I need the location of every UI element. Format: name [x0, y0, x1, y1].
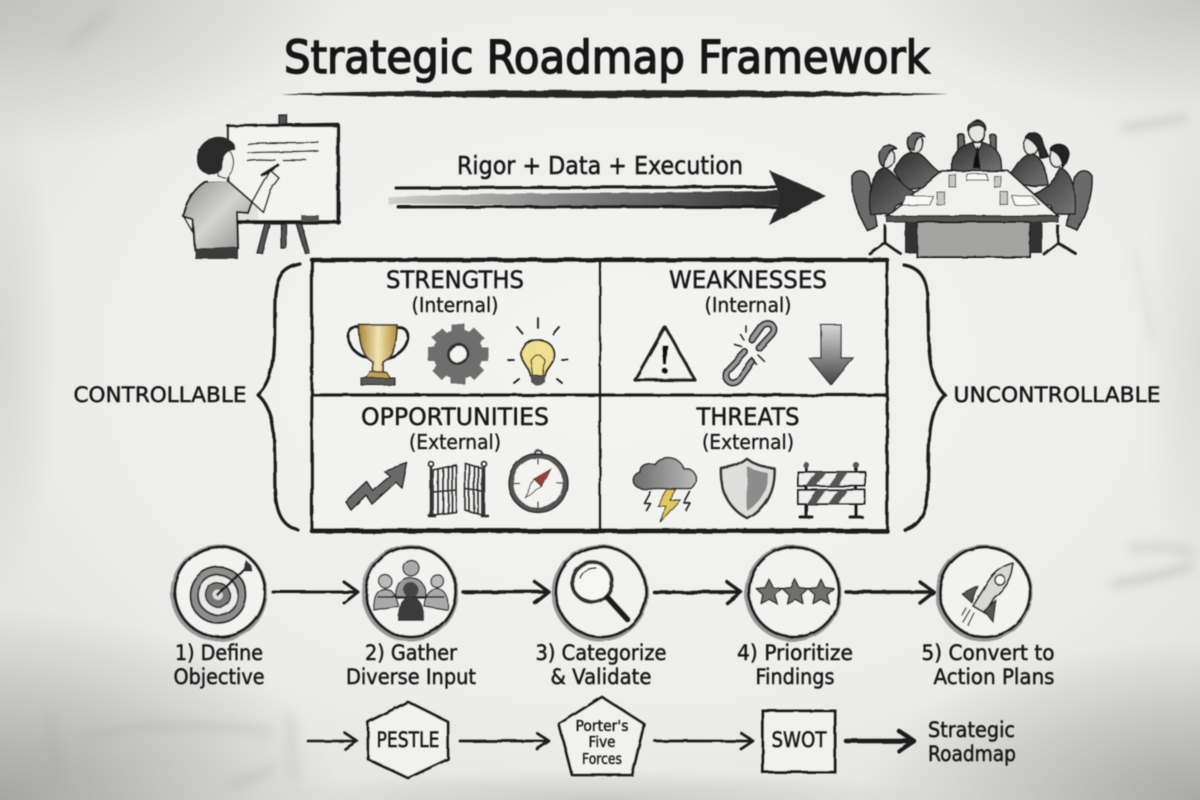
- left brace: controllable: [258, 264, 300, 530]
- heading: weaknesses: WEAKNESSES: [669, 266, 827, 294]
- step 4: prioritize findings: [737, 547, 853, 689]
- shape: Porter's Five Forces pentagon: Porter's: [576, 717, 629, 735]
- label: gather diverse input: [346, 641, 476, 689]
- arrow: step 1 to 2: [273, 582, 358, 603]
- shape: SWOT box: SWOT: [772, 728, 827, 752]
- label: uncontrollable: UNCONTROLLABLE: [954, 383, 1160, 407]
- chairs: [852, 134, 1092, 230]
- heading: threats: THREATS: [696, 403, 800, 431]
- arrow: step 2 to 3: [463, 582, 549, 603]
- icon: open gate: [428, 462, 489, 516]
- heading: threats: [696, 403, 800, 454]
- arrow: into PESTLE: [308, 733, 357, 749]
- label: controllable: CONTROLLABLE: [74, 383, 246, 407]
- label: define objective: 1) Define: [175, 641, 263, 665]
- arrow: SWOT to roadmap: [846, 731, 914, 751]
- icon: trophy: [348, 325, 408, 385]
- title underline: [280, 90, 948, 98]
- step 1: define objective: [173, 547, 265, 689]
- heading: strengths: (Internal): [412, 293, 498, 317]
- tools row: PESTLE to strategic roadmap: [308, 697, 1016, 778]
- icon: team around a table: [364, 547, 456, 639]
- arrow: step 3 to 4: [654, 582, 741, 603]
- table: [887, 171, 1058, 257]
- label: prioritize findings: 4) Prioritize: [737, 641, 853, 665]
- step 2: gather diverse input: [346, 547, 476, 689]
- label: gather diverse input: Diverse Input: [346, 665, 476, 689]
- label: convert to action plans: [922, 641, 1054, 689]
- arrow: PESTLE to Porter's: [460, 733, 549, 749]
- arrow: step 4 to 5: [846, 582, 934, 603]
- icon: rocket: [938, 547, 1030, 639]
- people: [870, 120, 1075, 214]
- shape: Porter's Five Forces pentagon: Forces: [582, 750, 622, 768]
- label: categorize and validate: [536, 641, 666, 689]
- right brace: uncontrollable: [904, 265, 945, 530]
- shape: Porter's Five Forces pentagon: Five: [588, 733, 616, 751]
- panel: weaknesses: [635, 266, 853, 385]
- icon: road barricade: [798, 462, 865, 517]
- icon: compass: [508, 450, 568, 512]
- shape: SWOT box: [763, 711, 835, 772]
- icon: storm cloud: [633, 458, 696, 522]
- icon: warning triangle: [635, 327, 695, 380]
- panel: threats: [633, 403, 865, 522]
- panel: strengths: [348, 266, 568, 396]
- process row: five steps: [173, 547, 1054, 689]
- shape: PESTLE hexagon: PESTLE: [376, 728, 440, 752]
- step 3: categorize and validate: [536, 547, 666, 689]
- icon: light bulb: [508, 318, 568, 385]
- easel and whiteboard: [228, 115, 339, 253]
- step 5: convert to action plans: [922, 547, 1054, 689]
- SWOT matrix grid: [312, 260, 887, 531]
- big arrow: [388, 170, 826, 225]
- heading: weaknesses: [669, 266, 827, 317]
- label: prioritize findings: Findings: [756, 665, 834, 689]
- panel: opportunities: [346, 403, 568, 516]
- heading: weaknesses: (Internal): [704, 293, 792, 317]
- title: Strategic Roadmap Framework: [284, 31, 930, 84]
- label: strategic roadmap: Roadmap: [928, 742, 1016, 766]
- arrow: Porter's to SWOT: [655, 733, 753, 749]
- icon: downward arrow: [809, 325, 853, 385]
- shape: PESTLE hexagon: [368, 702, 448, 778]
- person drawing on the board: [183, 137, 279, 259]
- heading: opportunities: (External): [409, 430, 501, 454]
- heading: opportunities: OPPORTUNITIES: [361, 403, 549, 431]
- label: categorize and validate: 3) Categorize: [536, 641, 666, 665]
- icon: magnifying glass: [554, 547, 646, 639]
- icon: broken chain: [726, 324, 774, 383]
- label: convert to action plans: 5) Convert to: [922, 641, 1054, 665]
- icon: rising arrow: [346, 463, 407, 510]
- label: categorize and validate: & Validate: [550, 665, 652, 689]
- heading: threats: (External): [702, 430, 794, 454]
- icon: target with dart: [173, 547, 265, 639]
- label: prioritize findings: [737, 641, 853, 689]
- label: define objective: [174, 641, 264, 689]
- heading: strengths: [386, 266, 524, 317]
- icon: gear: [416, 312, 500, 396]
- chair bases: [870, 226, 1076, 254]
- illustration: presenter at whiteboard: [183, 115, 339, 259]
- label: convert to action plans: Action Plans: [934, 665, 1054, 689]
- heading: opportunities: [361, 403, 549, 454]
- label: define objective: Objective: [174, 665, 264, 689]
- heading: strengths: STRENGTHS: [386, 266, 524, 294]
- icon: three stars: [747, 547, 839, 639]
- icon: shield: [721, 459, 774, 518]
- shape: Porter's Five Forces pentagon: [559, 697, 644, 775]
- label: strategic roadmap: Strategic: [928, 718, 1015, 742]
- label: strategic roadmap: [928, 718, 1016, 766]
- arrow label: Rigor + Data + Execution: [457, 151, 743, 180]
- label: gather diverse input: 2) Gather: [365, 641, 457, 665]
- illustration: boardroom meeting: [852, 120, 1092, 257]
